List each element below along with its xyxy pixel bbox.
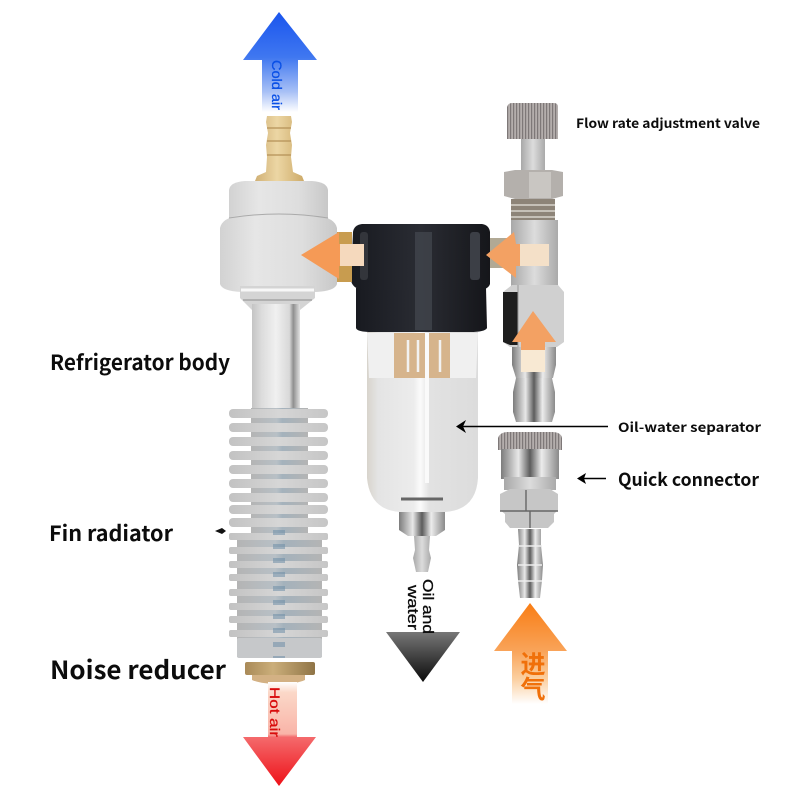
part: noise reducer brass fitting [245,662,315,684]
label: fin radiator: Fin radiator [49,518,174,548]
label: hot air: Hot air [267,687,283,737]
stem [521,139,545,171]
part: refrigerator body with fins [220,116,337,658]
valve tee body [511,220,558,286]
label: flow rate adjustment valve: Flow rate adjustment valve [576,113,760,132]
arrow: oil and water drain [386,579,460,682]
part: flow rate adjustment valve [490,103,564,422]
label: refrigerator body: Refrigerator body [50,347,230,377]
clear bowl [367,332,478,512]
arrow: cold air outlet [243,12,317,112]
side thread [490,238,514,268]
top hex nut [504,170,563,199]
plug [512,347,556,378]
chrome sleeve [501,449,559,479]
part: quick connector [498,432,562,598]
label: oil and water: Oil and [419,579,435,634]
black cap lower ring [356,288,487,332]
neck tube [252,304,300,412]
bowl inner rim [367,333,478,378]
pointer: oil-water separator [456,420,608,433]
arrow: oil and water drain: water [404,584,420,630]
top cylinder [229,181,328,226]
brass hose barb [255,116,304,181]
knurled knob [507,103,558,139]
knurled collar [498,432,562,450]
arrow: orange flow into body [301,232,364,279]
threads [511,199,555,221]
label: air inlet: 进气 [515,651,551,701]
lower nut [503,285,564,347]
part: oil-water separator [351,224,490,572]
hose barb [517,529,543,598]
drain sump [401,498,443,500]
arrow: orange flow up through valve [512,311,556,372]
connector: brass between body and separator [337,232,352,282]
hex nuts [500,489,558,528]
drain fitting [399,512,445,536]
marker: fin radiator pointer [215,528,226,534]
label: oil-water separator: Oil-water separator [618,417,761,436]
lower cylinder [220,214,337,310]
arrow: air inlet [494,603,567,704]
label: quick connector: Quick connector [618,466,759,492]
arrow: orange flow into separator [486,232,549,278]
black cap [351,224,490,290]
pointer: quick connector [577,473,606,484]
label: cold air: Cold air [269,60,284,111]
arrow: hot air outlet [243,682,316,786]
label: noise reducer: Noise reducer [50,651,226,687]
sintered filter [394,333,450,378]
fins [229,408,328,658]
